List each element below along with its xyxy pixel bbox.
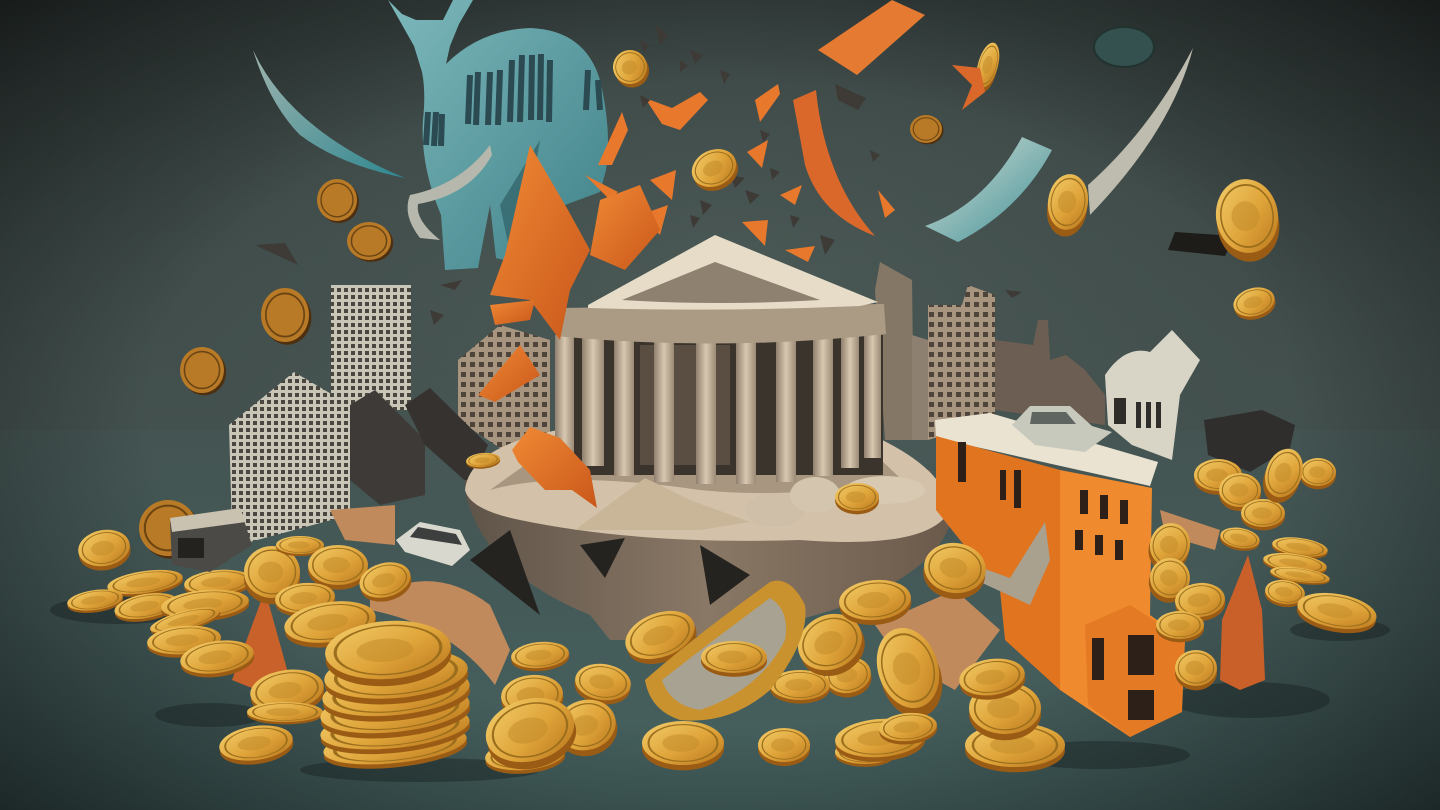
faint dark coin xyxy=(1094,27,1154,67)
coins: lower right pile xyxy=(834,539,1065,772)
dark truck xyxy=(1204,410,1295,472)
blue paper animal xyxy=(388,0,608,270)
city tower one xyxy=(875,262,914,440)
background floor xyxy=(0,430,1440,810)
small orange tower xyxy=(1220,555,1265,690)
white car on roof xyxy=(1012,406,1112,452)
orange paper bird near top right coin xyxy=(952,65,985,110)
entablature xyxy=(556,304,886,344)
white balcony xyxy=(960,522,1050,605)
interior windows xyxy=(640,345,730,465)
coins: floating xyxy=(180,40,1284,514)
banknote roll with coin xyxy=(645,581,806,721)
dark paper buildings xyxy=(350,390,425,505)
columns xyxy=(555,334,881,484)
roof xyxy=(935,413,1158,486)
background glow xyxy=(160,0,1280,580)
paper ribbon: white right xyxy=(1088,48,1193,215)
white house xyxy=(229,372,350,542)
coins: central tall stack xyxy=(318,617,473,775)
lower annex xyxy=(1085,605,1185,737)
dark paper annex xyxy=(405,388,488,485)
small orange cone xyxy=(232,590,290,692)
dark ribbon xyxy=(1168,232,1235,256)
grey paper curl xyxy=(408,145,492,240)
windows xyxy=(958,442,1154,720)
city tower three xyxy=(928,285,995,440)
paper ribbon: orange top xyxy=(818,0,925,75)
coins: right pile xyxy=(1144,443,1379,690)
bank temple xyxy=(555,235,886,484)
delivery van xyxy=(170,508,252,572)
falling shards: orange and dark confetti xyxy=(255,25,1022,325)
left city block xyxy=(229,285,550,542)
paper ribbon: orange curl xyxy=(793,90,875,236)
pediment relief xyxy=(622,262,820,303)
background wall xyxy=(0,0,1440,470)
distant skyline xyxy=(995,320,1105,425)
orange building xyxy=(935,406,1185,737)
paper ribbon: teal right xyxy=(925,137,1052,242)
floor shadows xyxy=(50,596,1390,782)
round podium drum xyxy=(465,425,952,640)
orange paper explosion xyxy=(478,145,660,508)
white domed building xyxy=(1105,330,1200,460)
coins: middle pile xyxy=(479,602,875,779)
pediment xyxy=(588,235,878,310)
right city block xyxy=(875,262,1295,472)
city tower two xyxy=(912,335,928,440)
coins: left pile xyxy=(66,500,416,769)
right face xyxy=(1060,470,1185,737)
left face xyxy=(936,436,1060,690)
background towers xyxy=(458,325,550,448)
copper coin rolls xyxy=(330,505,1220,690)
interior xyxy=(555,335,883,475)
tall white tower xyxy=(331,285,411,410)
paper ribbon: teal left xyxy=(253,50,405,178)
white car xyxy=(396,522,470,566)
